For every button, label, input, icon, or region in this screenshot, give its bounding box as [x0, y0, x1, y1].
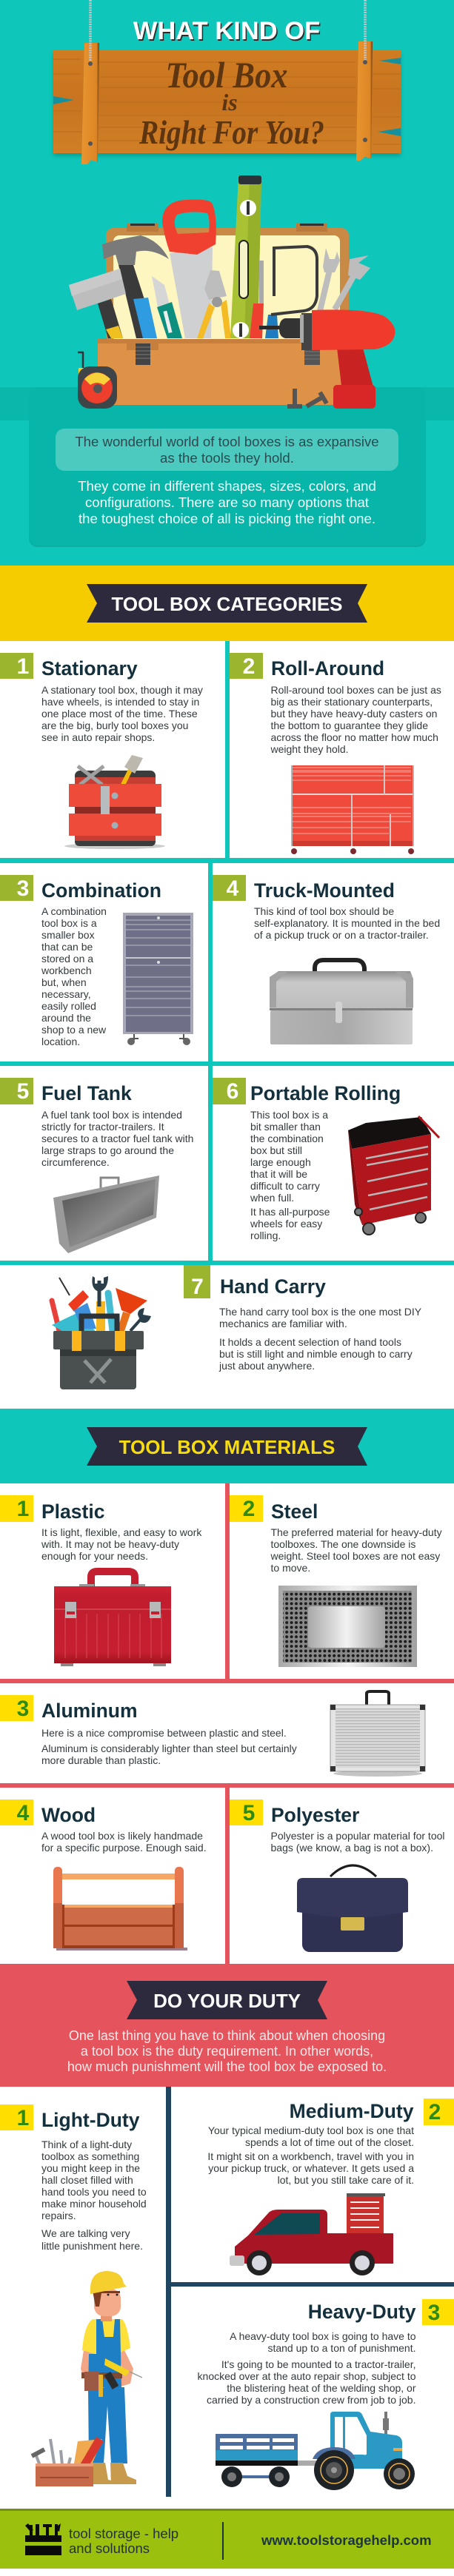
truck body [235, 2210, 393, 2264]
heading band: tool box materials: TOOL BOX MATERIALS [119, 1436, 335, 1458]
category 5: fuel tank: strictly for tractor-trailers. It [41, 1121, 164, 1133]
hacksaw [271, 246, 317, 315]
category 6: portable rolling: the combination [250, 1133, 324, 1144]
material 2: steel: weight. Steel tool boxes are not easy [270, 1550, 440, 1562]
light-duty: toolbox as something [41, 2150, 139, 2162]
material 5: polyester: Polyester is a popular material for tool [271, 1830, 444, 1842]
heavy-duty: 3 [428, 2301, 440, 2325]
category 5: fuel tank: secures to a tractor fuel tank with [41, 1133, 193, 1144]
category 4: truck-mounted: self-explanatory. It is mounted in the bed [254, 917, 440, 929]
medium-duty: your pickup truck, or whatever. It gets used a [208, 2162, 414, 2174]
category 7: hand carry [52, 1265, 422, 1389]
category 6: portable rolling: when full. [250, 1192, 294, 1204]
utility knife [152, 276, 182, 338]
category 6: portable rolling: box but still [250, 1144, 302, 1156]
illustration: open tool box with tools [69, 175, 395, 409]
sign text: Tool Box [166, 54, 287, 95]
banner [127, 1981, 327, 2019]
medium-duty: lot, but you still take care of it. [278, 2174, 414, 2186]
right strap [356, 41, 373, 161]
category 1: stationary: have wheels, is intended to stay in [41, 696, 199, 708]
chains [90, 0, 365, 63]
material 3: aluminum: 3 [17, 1697, 29, 1721]
image: navy polyester bag [297, 1865, 408, 1952]
intro text: configurations. There are so many options that [85, 494, 370, 510]
category 2: roll-around: weight they hold. [270, 743, 349, 755]
material 1: plastic: enough for your needs. [41, 1550, 148, 1562]
box front [98, 339, 347, 405]
medium-duty: Your typical medium-duty tool box is one that [208, 2124, 414, 2136]
intro text: One last thing you have to think about when choosing [69, 2028, 385, 2043]
box back panel [106, 224, 349, 343]
category 3: combination: location. [41, 1036, 80, 1047]
sign text: WHAT KIND OF [133, 17, 320, 45]
panel: categories grid [0, 641, 454, 1409]
website: www.toolstoragehelp.com [261, 2532, 432, 2548]
material 5: polyester: bags (we know, a bag is not a box). [271, 1842, 433, 1854]
wrenches [320, 248, 370, 311]
category 6: portable rolling: Portable Rolling [250, 1082, 401, 1104]
material 3: aluminum: Here is a nice compromise between plastic and steel. [41, 1727, 287, 1739]
logo icon [25, 2523, 61, 2555]
medium-duty: Medium-Duty [290, 2100, 414, 2122]
legs [88, 2387, 127, 2463]
category 7: hand carry: Hand Carry [220, 1275, 326, 1298]
category 3: combination: but, when [41, 976, 87, 988]
category 4: truck-mounted [213, 875, 440, 1044]
category 7: hand carry: but is still light and nimble enough to carry [219, 1348, 413, 1360]
image: perforated steel panel [278, 1586, 417, 1667]
category 2: roll-around: the bottom to guarantee they glide [271, 720, 428, 731]
screwdrivers [250, 261, 278, 338]
category 5: fuel tank: 5 [17, 1079, 29, 1104]
material 2: steel: toolboxes. The one downside is [271, 1538, 415, 1550]
material 3: aluminum: Aluminum is considerably lighter than steel but certainly [41, 1743, 297, 1754]
image: red roll-around cabinet [291, 765, 414, 854]
material 5: polyester: Polyester [271, 1804, 359, 1826]
medium-duty [207, 2099, 454, 2275]
category 5: fuel tank: circumference. [41, 1156, 110, 1168]
material 1: plastic: It is light, flexible, and easy to work [41, 1526, 202, 1538]
category 3: combination: A combination [41, 905, 107, 917]
power drill [259, 309, 395, 409]
material 5: polyester: 5 [243, 1801, 255, 1825]
drill [104, 2358, 142, 2389]
light-duty: hall closet filled with [41, 2174, 133, 2186]
image: wooden tool box [53, 1867, 187, 1951]
category 3: combination: smaller box [41, 929, 95, 941]
intro highlight [56, 429, 398, 471]
heading band: tool box categories: TOOL BOX CATEGORIES [111, 593, 343, 615]
medium-duty: 2 [429, 2100, 441, 2124]
material 2: steel: to move. [271, 1562, 310, 1574]
material 4: wood: A wood tool box is likely handmade [41, 1830, 203, 1842]
category 4: truck-mounted: 4 [227, 876, 239, 901]
light-duty: hand tools you need to [41, 2186, 147, 2198]
heavy-duty: Heavy-Duty [308, 2301, 416, 2323]
image: red stationary tool box [64, 755, 165, 849]
heading band: tool box categories [0, 566, 454, 641]
material 2: steel [230, 1495, 442, 1667]
sign text [133, 17, 324, 151]
image: hand carry tool box with tools [52, 1276, 151, 1389]
tool belt [81, 2372, 122, 2378]
category 7: hand carry: 7 [191, 1275, 204, 1299]
category 6: portable rolling [213, 1078, 439, 1241]
wooden sign [53, 0, 401, 164]
intro text: how much punishment will the tool box be exposed to. [67, 2059, 387, 2074]
category 3: combination: workbench [41, 965, 92, 976]
heavy-duty: It's going to be mounted to a tractor-trailer, [221, 2358, 416, 2370]
category 2: roll-around: 2 [243, 654, 255, 679]
category 1: stationary [0, 653, 203, 849]
heavy-duty: carried by a construction crew from job to job. [207, 2394, 416, 2406]
material 2: steel: The preferred material for heavy-duty [271, 1526, 442, 1538]
neck and head [101, 2310, 112, 2321]
panel: duty grid [0, 2087, 454, 2509]
image: red rolling cabinet [348, 1116, 439, 1235]
image: worker with tool box [32, 2271, 142, 2486]
footer [0, 2509, 454, 2569]
light-duty: 1 [17, 2106, 29, 2130]
category 6: portable rolling: large enough [250, 1156, 311, 1168]
heavy-duty [198, 2299, 454, 2490]
material 1: plastic: with. It may not be heavy-duty [41, 1538, 179, 1550]
category 4: truck-mounted: of a pickup truck or on a tractor-trailer. [254, 929, 429, 941]
intro highlight: as the tools they hold. [160, 450, 294, 466]
heading band: tool box materials [0, 1409, 454, 1483]
intro text [78, 478, 376, 526]
material 4: wood: 4 [17, 1801, 30, 1825]
heavy-duty: the blistering heat of the welding shop, or [227, 2382, 416, 2394]
intro text: a tool box is the duty requirement. In other words, [81, 2044, 373, 2059]
shirt [82, 2319, 130, 2354]
material 4: wood: for a specific purpose. Enough said. [41, 1842, 207, 1854]
sign text: Right For You? [138, 113, 324, 151]
category 2: roll-around: Roll-Around [271, 657, 384, 680]
category 4: truck-mounted: Truck-Mounted [254, 879, 395, 902]
image: red plastic tool box [54, 1572, 171, 1666]
small spare tools [287, 389, 327, 409]
category 1: stationary: one place most of the time. These [41, 708, 198, 720]
intro text: the toughest choice of all is picking the right one. [79, 511, 375, 526]
image: grey combination cabinet [123, 913, 193, 1045]
category 4: truck-mounted: This kind of tool box should be [254, 905, 394, 917]
spirit level [230, 175, 261, 338]
category 7: hand carry: mechanics are familiar with. [219, 1318, 347, 1329]
light-duty: Think of a light-duty [41, 2139, 132, 2150]
category 2: roll-around: big as their stationary counterparts, [271, 696, 433, 708]
material 3: aluminum [0, 1691, 425, 1777]
material 1: plastic: Plastic [41, 1500, 104, 1523]
intro highlight: The wonderful world of tool boxes is as expansive [75, 434, 379, 449]
mallet [69, 269, 126, 338]
category 1: stationary: are the big, burly tool boxes you [41, 720, 188, 731]
hand saw [162, 200, 216, 338]
category 3: combination: that can be [41, 941, 93, 953]
trailer [216, 2434, 316, 2487]
light-duty: Light-Duty [41, 2109, 140, 2131]
light-duty: We are talking very [41, 2227, 130, 2239]
material 4: wood: Wood [41, 1804, 96, 1826]
material 2: steel: 2 [243, 1497, 255, 1521]
material 4: wood [0, 1799, 207, 1951]
medium-duty: It might sit on a workbench, travel with you in [207, 2150, 414, 2162]
overalls [88, 2319, 121, 2387]
category 3: combination: Combination [41, 879, 161, 902]
medium-duty: spends a lot of time out of the closet. [245, 2136, 414, 2148]
category 5: fuel tank: large straps to go around the [41, 1144, 174, 1156]
intro text: They come in different shapes, sizes, colors, and [78, 478, 376, 494]
category 6: portable rolling: bit smaller than [250, 1121, 321, 1133]
category 3: combination: easily rolled [41, 1000, 96, 1012]
image: silver truck tool box [270, 960, 413, 1044]
arms [81, 2350, 111, 2388]
category 3: combination: stored on a [41, 953, 93, 965]
panel: do your duty [0, 1964, 454, 2087]
panel: hero [0, 0, 454, 566]
category 6: portable rolling: 6 [227, 1079, 238, 1104]
image: tractor and trailer [216, 2412, 415, 2490]
sign text: is [221, 89, 238, 115]
category 5: fuel tank: Fuel Tank [41, 1082, 132, 1104]
heavy-duty: stand up to a ton of punishment. [267, 2342, 416, 2354]
category 5: fuel tank [0, 1078, 193, 1253]
category 1: stationary: Stationary [41, 657, 138, 680]
category 3: combination: 3 [17, 876, 29, 901]
category 2: roll-around: Roll-around tool boxes can be just as [271, 684, 441, 696]
light-duty: you might keep in the [41, 2162, 140, 2174]
category 6: portable rolling: difficult to carry [250, 1180, 320, 1192]
intro text [67, 2028, 387, 2074]
material 1: plastic [0, 1495, 202, 1666]
category 7: hand carry: just about anywhere. [218, 1360, 315, 1372]
panel: materials grid [0, 1483, 454, 1964]
category 1: stationary: see in auto repair shops. [41, 731, 155, 743]
helmet [90, 2271, 127, 2294]
left strap [81, 43, 99, 164]
category 2: roll-around: but they have heavy-duty casters on [271, 708, 437, 720]
hammer [102, 235, 169, 338]
cabinet [347, 2193, 385, 2235]
material 5: polyester [230, 1799, 444, 1952]
category 7: hand carry: It holds a decent selection of hand tools [219, 1336, 401, 1348]
tool box [32, 2437, 104, 2486]
tape measure [78, 352, 117, 409]
light-duty: make minor household [41, 2198, 147, 2210]
category 7: hand carry: The hand carry tool box is the one most DIY [219, 1306, 422, 1318]
material 3: aluminum: Aluminum [41, 1700, 138, 1722]
sign text: WHAT KIND OF [134, 19, 321, 47]
category 2: roll-around [230, 653, 441, 854]
material 2: steel: Steel [271, 1500, 318, 1523]
category 6: portable rolling: wheels for easy [250, 1218, 322, 1230]
category 3: combination: necessary, [41, 988, 91, 1000]
material 3: aluminum: more durable than plastic. [41, 1754, 161, 1766]
category 3: combination: shop to a new [41, 1024, 107, 1036]
tractor [313, 2412, 415, 2490]
category 3: combination: tool box is a [41, 917, 97, 929]
brand text [69, 2526, 178, 2556]
boots [93, 2463, 136, 2484]
category 2: roll-around: across the floor no matter how much [271, 731, 438, 743]
image: fuel tank case [53, 1175, 159, 1253]
category 1: stationary: 1 [17, 654, 29, 679]
heavy-duty: knocked over at the auto repair shop, subject to [198, 2370, 416, 2382]
material 1: plastic: 1 [17, 1497, 29, 1521]
heavy-duty: A heavy-duty tool box is going to have to [230, 2330, 416, 2342]
light-duty [0, 2104, 147, 2486]
category 1: stationary: A stationary tool box, though it may [41, 684, 203, 696]
category 6: portable rolling: rolling. [250, 1230, 281, 1241]
banner: DO YOUR DUTY [153, 1990, 301, 2012]
category 3: combination [0, 875, 193, 1047]
image: red pickup truck with cabinet [230, 2193, 393, 2275]
category 6: portable rolling: It has all-purpose [250, 1206, 330, 1218]
category 6: portable rolling: that it will be [250, 1168, 307, 1180]
category 3: combination: around the [41, 1012, 91, 1024]
image: aluminum case [330, 1691, 425, 1777]
category 5: fuel tank: A fuel tank tool box is intended [41, 1109, 182, 1121]
light-duty: repairs. [41, 2210, 76, 2221]
brand text: and solutions [69, 2540, 150, 2556]
light-duty: little punishment here. [41, 2240, 143, 2252]
category 6: portable rolling: This tool box is a [250, 1109, 328, 1121]
brand text: tool storage - help [69, 2526, 178, 2541]
pliers [197, 270, 231, 338]
